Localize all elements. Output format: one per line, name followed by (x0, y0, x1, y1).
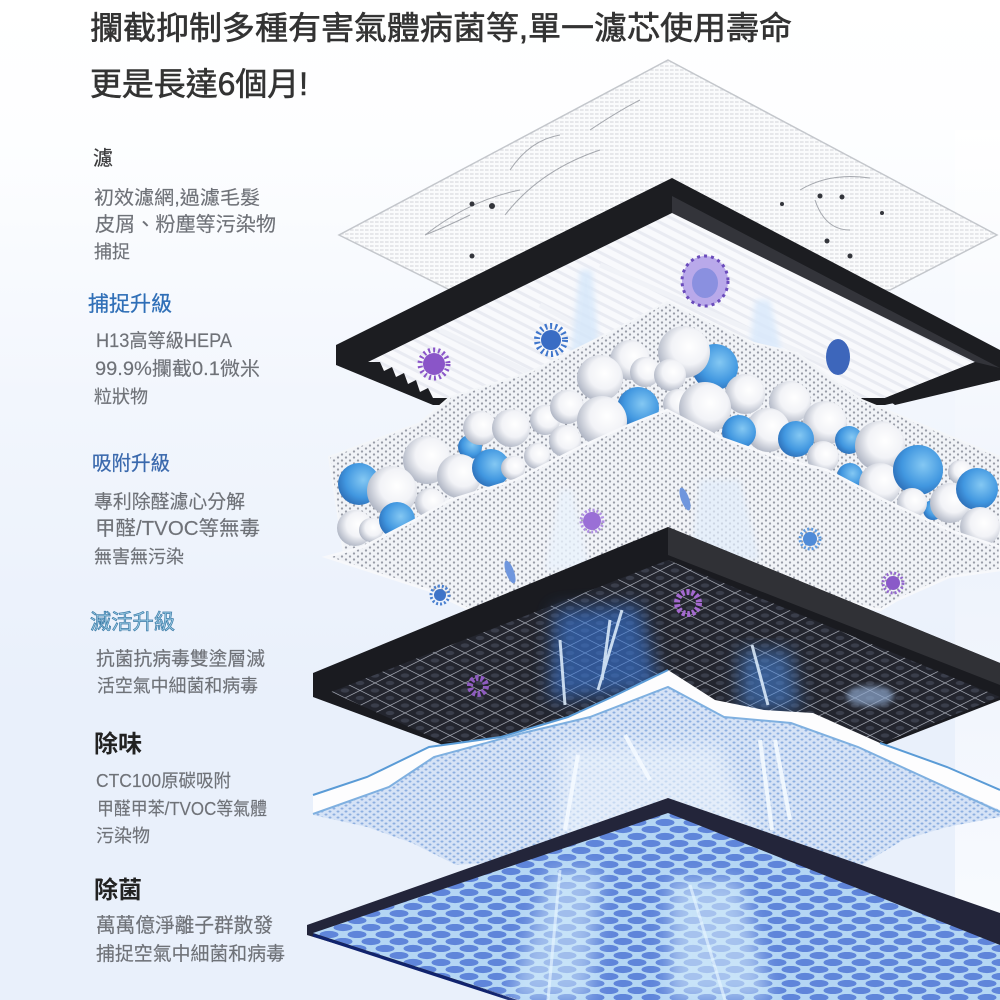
layer 3: back sheet (329, 302, 1000, 560)
text block: filter: 濾 (93, 147, 113, 170)
icon: blue virus on sheet left (431, 586, 449, 604)
text block: inactivation upgrade (90, 611, 265, 696)
layer 6: blue hex mesh frame (307, 798, 1000, 1000)
text block: filter: 皮屑、粉塵等污染物 (95, 213, 276, 236)
heading: 更是長達6個月! (90, 66, 308, 102)
text block: sterilize: 捕捉空氣中細菌和病毒 (96, 943, 285, 965)
text block: deodorize: 甲醛甲苯/TVOC等氣體 (97, 799, 267, 819)
text block: filter: 初效濾網,過濾毛髮 (94, 187, 260, 209)
balls (337, 326, 1000, 547)
text block: deodorize: 除味 (94, 731, 142, 758)
text block: capture upgrade: 捕捉升級 (88, 293, 172, 316)
text block: deodorize (94, 731, 267, 846)
layer 1: primary mesh (339, 60, 997, 290)
text block: sterilize (94, 877, 285, 965)
icon: purple virus large (682, 256, 728, 306)
text block: sterilize: 萬萬億淨離子群散發 (96, 914, 273, 937)
heading (90, 10, 792, 102)
text block: capture upgrade: 99.9%攔截0.1微米 (95, 358, 260, 380)
icon: purple virus on sheet right (883, 573, 903, 593)
text block: filter (93, 147, 276, 262)
text block: sterilize: 除菌 (94, 877, 142, 904)
text block: capture upgrade: 粒狀物 (94, 387, 148, 407)
text block: deodorize: 污染物 (96, 826, 150, 846)
icon: blue bacillus on sheet left (502, 559, 518, 585)
layer 2: HEPA frame (336, 178, 1000, 405)
heading: 攔截抑制多種有害氣體病菌等,單一濾芯使用壽命 (90, 10, 792, 46)
text block: adsorption upgrade: 無害無污染 (94, 547, 184, 567)
text block: adsorption upgrade: 甲醛/TVOC等無毒 (95, 517, 260, 540)
text block: capture upgrade: H13高等級HEPA (96, 330, 232, 352)
text block: deodorize: CTC100原碳吸附 (96, 771, 231, 791)
text block: capture upgrade (88, 293, 260, 407)
layer 3: front sheet (326, 410, 1000, 617)
icon: purple virus on dark mesh top (677, 592, 699, 614)
layer 4: dark mesh frame (313, 527, 1000, 745)
text block: inactivation upgrade: 滅活升級 (90, 611, 175, 634)
text block: inactivation upgrade: 活空氣中細菌和病毒 (97, 676, 258, 696)
icon: purple virus on dark mesh left (470, 678, 486, 694)
text block: inactivation upgrade: 抗菌抗病毒雙塗層滅 (96, 648, 265, 670)
icon: purple virus small (420, 350, 448, 378)
layer 5: blue composite sheet (313, 670, 1000, 866)
icon: purple virus on sheet (581, 510, 603, 532)
text block: adsorption upgrade (92, 452, 260, 567)
icon: blue virus on sheet right (800, 529, 820, 549)
text block: adsorption upgrade: 專利除醛濾心分解 (94, 491, 245, 513)
text block: adsorption upgrade: 吸附升級 (92, 452, 170, 475)
text block: filter: 捕捉 (94, 242, 130, 262)
icon: blue virus (537, 326, 565, 354)
icon: blue bacillus on sheet (677, 486, 693, 512)
icon: blue bacillus (826, 339, 850, 375)
